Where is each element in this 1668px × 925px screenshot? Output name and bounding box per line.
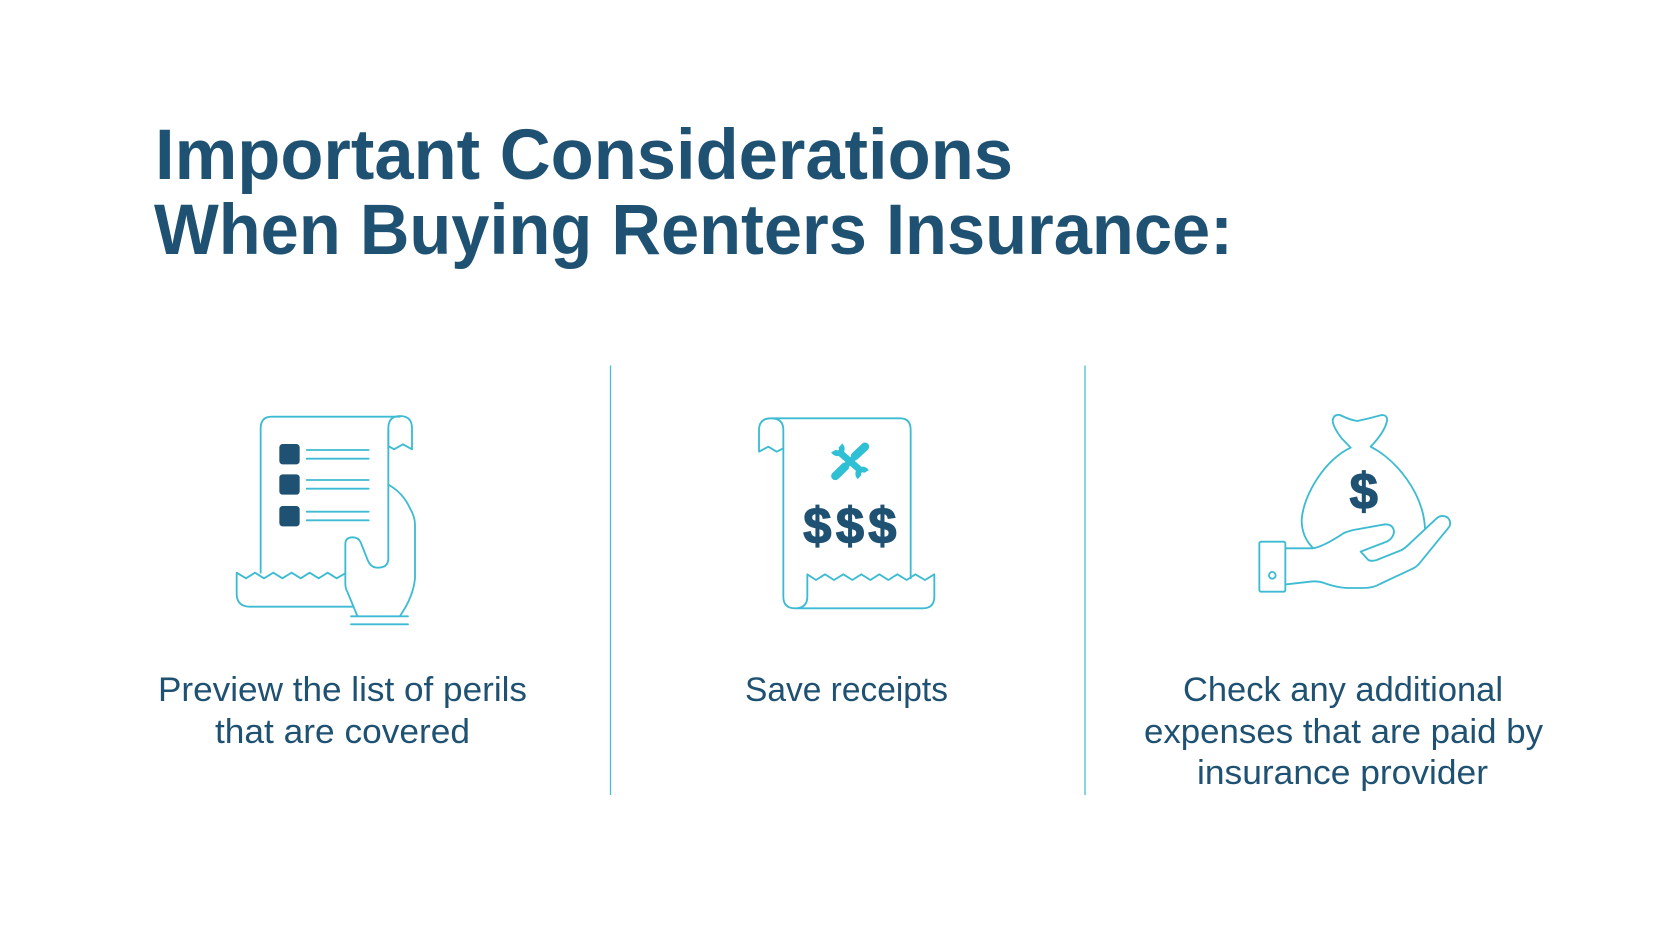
text: save receipts: Save receipts bbox=[745, 671, 948, 709]
icon: receipt scroll with tools and dollars: $ bbox=[836, 497, 864, 554]
icon: receipt scroll with tools and dollars: $ bbox=[868, 497, 896, 554]
panel: save receipts bbox=[745, 418, 948, 709]
icon: hand holding money bag bbox=[1259, 415, 1450, 592]
text: additional expenses bbox=[1144, 671, 1543, 792]
text: preview perils: that are covered bbox=[215, 713, 470, 751]
text: additional expenses: insurance provider bbox=[1197, 754, 1488, 792]
text: preview perils: Preview the list of perils bbox=[158, 671, 527, 709]
panel: additional expenses bbox=[1144, 415, 1543, 792]
icon: hand holding money bag: $ bbox=[1350, 462, 1378, 519]
icon: checklist scroll with hand bbox=[237, 416, 415, 624]
panel: preview perils bbox=[158, 416, 527, 751]
title: When Buying Renters Insurance: bbox=[154, 191, 1233, 270]
text: preview perils bbox=[158, 671, 527, 751]
icon: receipt scroll with tools and dollars: $ bbox=[803, 497, 831, 554]
text: additional expenses: Check any additional bbox=[1183, 671, 1503, 709]
icon: receipt scroll with tools and dollars bbox=[759, 418, 934, 608]
title bbox=[154, 116, 1233, 270]
title: Important Considerations bbox=[155, 116, 1013, 195]
text: additional expenses: expenses that are paid by bbox=[1144, 713, 1543, 751]
